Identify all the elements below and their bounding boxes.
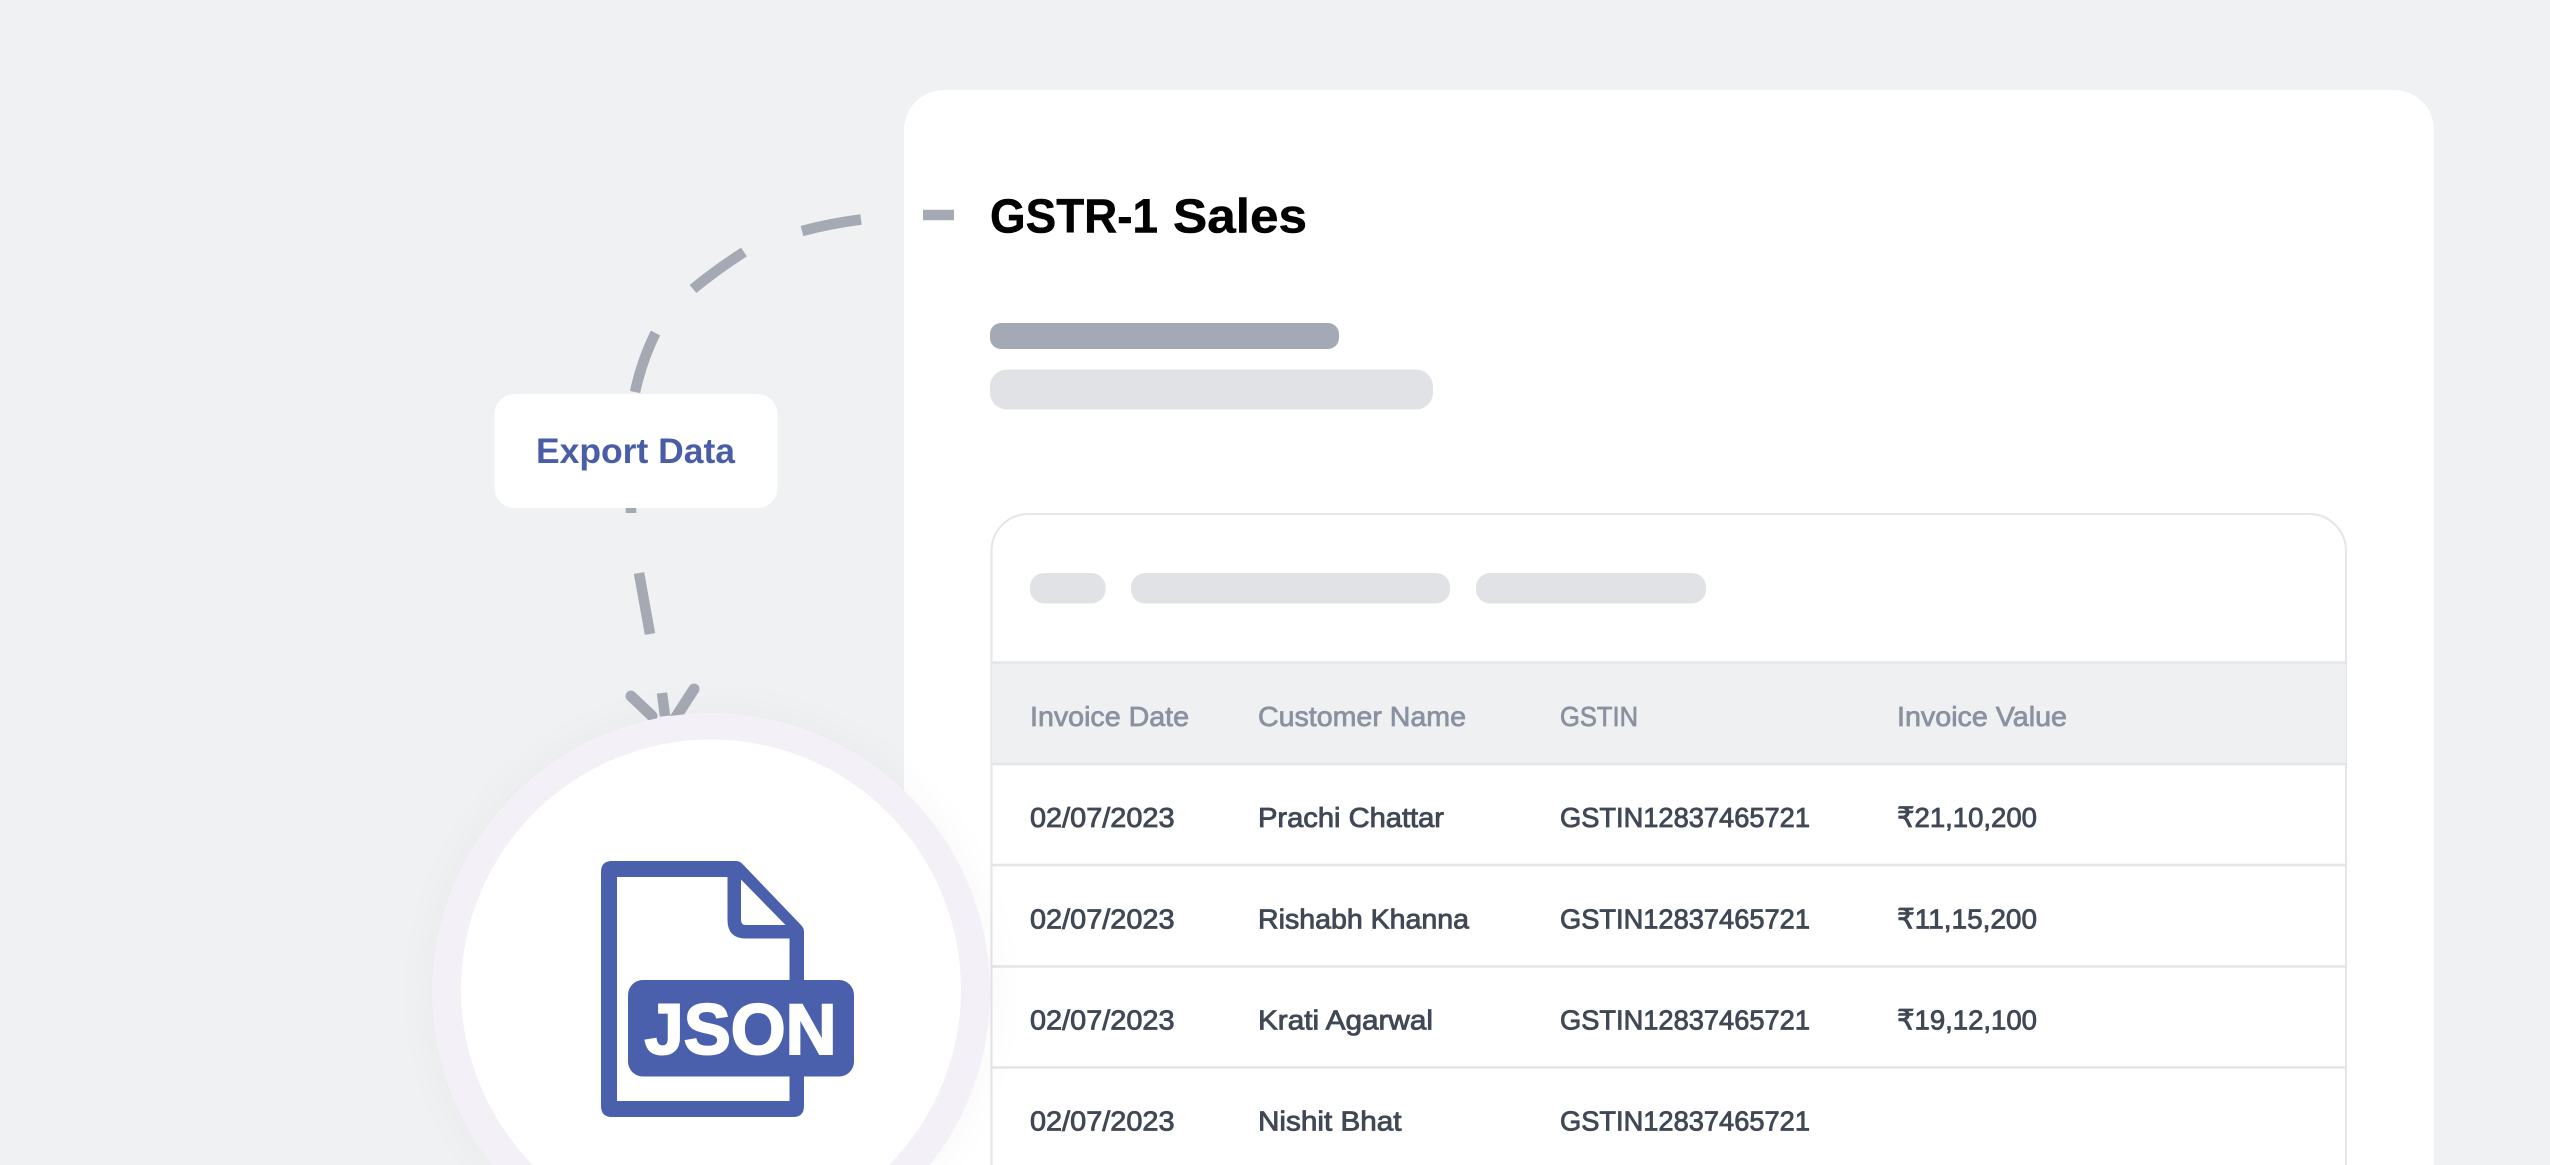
callout: Export Data: Export Data [536, 432, 736, 471]
table header row [992, 662, 2346, 764]
panel: GSTR-1 Sales [904, 90, 2434, 1165]
table header row: GSTIN [1560, 701, 1638, 732]
table row: Prachi Chattar [1030, 802, 2037, 833]
card outline [992, 514, 2346, 1165]
halo ring [432, 713, 990, 1165]
table row: Nishit Bhat: GSTIN12837465721 [1560, 1106, 1810, 1136]
heading: GSTR-1 Sales: Sales [1173, 190, 1307, 244]
table row: Krati Agarwal: ₹19,12,100 [1897, 1004, 2037, 1036]
table header row: Invoice Value [1897, 701, 2067, 732]
JSON label plate [628, 980, 854, 1076]
document outline with folded corner [601, 861, 804, 1117]
table row: Krati Agarwal: Krati Agarwal [1258, 1004, 1433, 1036]
panel background [904, 90, 2434, 1165]
table row: Rishabh Khanna: Rishabh Khanna [1258, 904, 1469, 934]
callout: Export Data [494, 394, 778, 508]
toolbar skeleton pills [1030, 573, 1706, 604]
heading: GSTR-1 Sales: GSTR-1 [990, 190, 1158, 244]
table row: Nishit Bhat: 02/07/2023 [1030, 1106, 1174, 1136]
table row: Nishit Bhat [1030, 1106, 1810, 1136]
JSON label text: JSON [644, 991, 836, 1070]
table row: Rishabh Khanna: GSTIN12837465721 [1560, 904, 1810, 934]
table card [991, 514, 2347, 1165]
table row: Prachi Chattar: Prachi Chattar [1258, 802, 1444, 833]
skeleton subtitle bar [990, 370, 1433, 410]
arrow: dashed curve from panel to JSON file [631, 215, 954, 720]
table row: Rishabh Khanna [1030, 904, 2037, 934]
table header row: Invoice Date [1030, 701, 1189, 732]
icon: JSON file [601, 861, 854, 1117]
row separators [991, 662, 2347, 1068]
skeleton title bar [990, 323, 1339, 349]
heading: GSTR-1 Sales [990, 190, 1307, 244]
soft shadow [432, 713, 990, 1165]
table row: Prachi Chattar: 02/07/2023 [1030, 802, 1174, 833]
table row: Prachi Chattar: ₹21,10,200 [1897, 802, 2037, 833]
table header row: Customer Name [1258, 701, 1466, 732]
white disc [461, 739, 961, 1165]
table row: Nishit Bhat: Nishit Bhat [1258, 1106, 1402, 1136]
table row: Krati Agarwal: GSTIN12837465721 [1560, 1004, 1810, 1036]
JSON badge circle [432, 713, 990, 1165]
table row: Prachi Chattar: GSTIN12837465721 [1560, 802, 1810, 833]
table row: Krati Agarwal [1030, 1004, 2037, 1036]
table row: Rishabh Khanna: ₹11,15,200 [1897, 904, 2037, 934]
table row: Krati Agarwal: 02/07/2023 [1030, 1004, 1174, 1036]
table row: Rishabh Khanna: 02/07/2023 [1030, 904, 1174, 934]
